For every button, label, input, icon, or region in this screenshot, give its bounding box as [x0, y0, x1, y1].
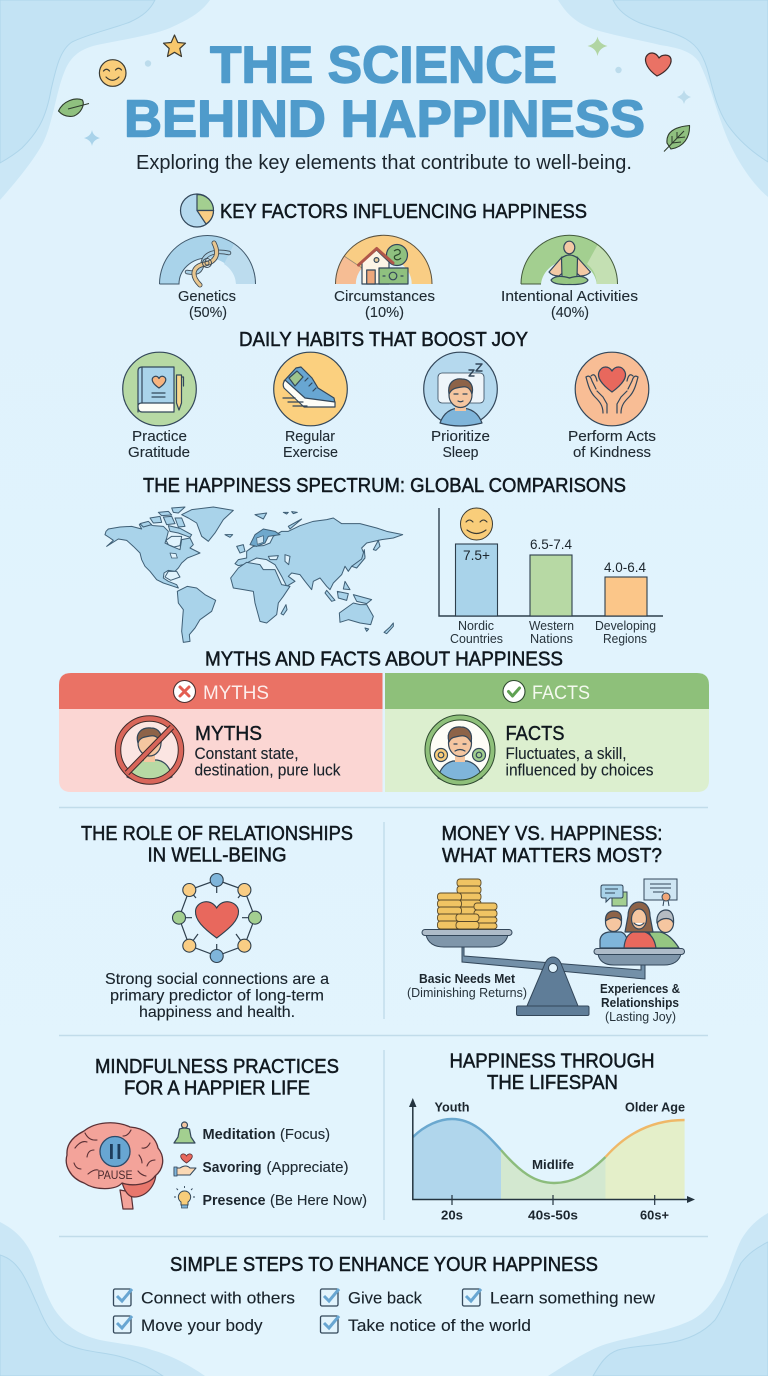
right pan with people: [594, 879, 684, 965]
heading: [81, 823, 353, 866]
chart labels: 60s+: [640, 1208, 669, 1222]
icon: check badge: [503, 680, 525, 702]
heading: MINDFULNESS PRACTICES: [95, 1056, 339, 1078]
chart labels: 20s: [441, 1208, 463, 1222]
heading: THE LIFESPAN: [487, 1072, 618, 1094]
right scale label: [600, 981, 680, 1024]
label: exercise: [283, 428, 338, 461]
relationships body text: happiness and health.: [139, 1004, 295, 1021]
chart labels: Western: [529, 619, 574, 633]
habit: gratitude: [123, 352, 196, 426]
heading: DAILY HABITS THAT BOOST JOY: [239, 329, 528, 351]
left scale label: Basic Needs Met: [419, 971, 516, 986]
section: happiness spectrum: [105, 475, 663, 646]
icon: brain with pause: [66, 1123, 163, 1209]
icon: crossed-out person: [118, 718, 181, 782]
section: simple steps: [114, 1254, 656, 1335]
heading: SIMPLE STEPS TO ENHANCE YOUR HAPPINESS: [170, 1254, 598, 1276]
heading: THE HAPPINESS SPECTRUM: GLOBAL COMPARISONS: [143, 475, 626, 497]
heading: MONEY VS. HAPPINESS:: [442, 823, 662, 845]
myths text: MYTHS: [195, 723, 262, 745]
background blob: bottom right: [548, 1213, 768, 1376]
chart labels: Regions: [603, 632, 647, 646]
heading: [95, 1056, 339, 1100]
icon: heart: [645, 53, 671, 76]
practice: presence: Presence: [202, 1192, 266, 1209]
label: exercise: Exercise: [283, 444, 338, 461]
icon: balance scale: [422, 879, 684, 1016]
icon: pie chart: [180, 194, 214, 227]
bar: developing: 4.0-6.4: [604, 560, 646, 575]
background blob: bottom left: [0, 1222, 205, 1376]
world map: [105, 507, 403, 642]
facts text: Fluctuates, a skill,: [506, 744, 626, 763]
step: move your body: Move your body: [141, 1316, 263, 1335]
label: gratitude: [128, 428, 190, 461]
icon: house, coin and banknote: [358, 244, 408, 284]
practice: savoring: Savoring: [202, 1159, 262, 1176]
heading: IN WELL-BEING: [148, 844, 286, 866]
practice: meditation: (Focus): [280, 1126, 330, 1143]
myths text: destination, pure luck: [194, 760, 341, 780]
chart labels: [434, 1100, 685, 1222]
people: [600, 902, 679, 948]
label: intentional activities: [501, 288, 638, 321]
icon: social network heart: [172, 874, 262, 962]
facts text: influenced by choices: [506, 760, 654, 780]
practice: presence: (Be Here Now): [270, 1192, 367, 1209]
facts text: FACTS: [506, 723, 564, 745]
habit: sleep: [424, 352, 497, 426]
section: daily habits: [123, 329, 656, 461]
heading: MYTHS AND FACTS ABOUT HAPPINESS: [205, 648, 563, 670]
practice: savoring: [174, 1154, 349, 1176]
panel: facts: [385, 673, 709, 792]
label: sleep: Sleep: [442, 444, 478, 461]
chart labels: Nations: [530, 632, 573, 646]
myths banner label: MYTHS: [203, 683, 269, 704]
label: sleep: [431, 428, 490, 461]
heading: FOR A HAPPIER LIFE: [124, 1078, 310, 1100]
bar: nordic: 7.5+: [463, 548, 490, 563]
icon: right leaf: [664, 126, 690, 152]
step: give back: Give back: [348, 1288, 422, 1308]
dot right: [615, 67, 622, 73]
heading: KEY FACTORS INFLUENCING HAPPINESS: [220, 201, 587, 223]
title: THE SCIENCE: [210, 36, 557, 94]
chart labels: Countries: [450, 632, 503, 646]
gauge: intentional activities: [521, 235, 618, 285]
icon: DNA: [187, 243, 229, 285]
gauge: circumstances: [335, 235, 432, 284]
label: intentional activities: (40%): [551, 304, 589, 321]
icon: person with emotions: [427, 717, 493, 784]
title: [124, 36, 645, 148]
background blob: top left: [0, 0, 210, 200]
label: genetics: Genetics: [178, 288, 236, 305]
label: circumstances: [334, 288, 435, 321]
heading: [442, 823, 662, 867]
label: genetics: (50%): [189, 304, 227, 321]
chart labels: Youth: [434, 1100, 470, 1114]
subtitle: Exploring the key elements that contribute to well-being.: [136, 152, 632, 174]
label: genetics: [178, 288, 236, 321]
label: kindness: [568, 428, 656, 461]
section: myths and facts: [59, 648, 709, 792]
relationships body text: primary predictor of long-term: [110, 988, 324, 1004]
chart labels: Midlife: [532, 1157, 574, 1172]
right scale label: (Lasting Joy): [605, 1009, 676, 1024]
icon: star: [164, 35, 186, 56]
section: key factors: [160, 194, 638, 321]
bar: western: 6.5-7.4: [530, 537, 572, 552]
left pan with coins: [422, 879, 512, 947]
heading: THE ROLE OF RELATIONSHIPS: [81, 823, 353, 845]
bar chart: [439, 508, 663, 646]
background blob: top right: [558, 0, 768, 197]
right scale label: Experiences &: [600, 981, 680, 996]
myths text: Constant state,: [194, 744, 298, 763]
step: take notice of the world: Take notice of the world: [348, 1316, 531, 1335]
chart labels: Nordic: [458, 619, 494, 633]
dot left: [145, 60, 151, 67]
label: gratitude: Gratitude: [128, 444, 190, 461]
certificate: [644, 879, 677, 906]
label: circumstances: Circumstances: [334, 288, 435, 305]
icon: blue sparkle right: [677, 90, 691, 104]
label: kindness: Perform Acts: [568, 428, 656, 445]
facts banner label: FACTS: [532, 683, 590, 704]
left scale label: (Diminishing Returns): [407, 985, 527, 1000]
chat bubbles: [601, 885, 627, 906]
heading: HAPPINESS THROUGH: [450, 1050, 654, 1072]
relationships body text: Strong social connections are a: [105, 971, 329, 988]
practice: meditation: [174, 1122, 330, 1143]
label: circumstances: (10%): [365, 304, 404, 321]
relationships body text: [105, 971, 329, 1021]
icon: left leaf: [58, 99, 89, 116]
bar: western: [530, 537, 572, 616]
chart labels: 40s-50s: [528, 1208, 578, 1222]
label: exercise: Regular: [285, 428, 335, 445]
icon: green sparkle: [588, 36, 608, 56]
section: relationships: [81, 823, 353, 1021]
icon: smiley: [460, 508, 492, 540]
section: mindfulness: [66, 1056, 367, 1209]
heading: [450, 1050, 654, 1094]
icon: brain with pause: PAUSE: [98, 1168, 132, 1182]
heading: WHAT MATTERS MOST?: [442, 845, 662, 867]
title: BEHIND HAPPINESS: [124, 90, 645, 148]
icon: meditating figure: [549, 241, 590, 285]
label: kindness: of Kindness: [573, 444, 651, 461]
step: learn something new: Learn something new: [490, 1288, 656, 1308]
facts text: [506, 723, 654, 780]
bar: nordic: [456, 544, 498, 616]
panel: myths: [59, 673, 382, 792]
label: sleep: Prioritize: [431, 428, 490, 445]
habit: kindness: [575, 352, 649, 426]
practice: meditation: Meditation: [202, 1126, 276, 1143]
chart labels: Developing: [595, 619, 656, 633]
decorative icons around the title: [58, 35, 691, 152]
chart labels: [450, 619, 656, 646]
icon: blue sparkle left: [84, 130, 100, 146]
myths text: [194, 723, 341, 780]
step: connect with others: Connect with others: [141, 1288, 295, 1308]
gauge: genetics: [160, 236, 256, 285]
left scale label: [407, 971, 527, 1000]
practice: savoring: (Appreciate): [266, 1159, 349, 1176]
label: intentional activities: Intentional Activities: [501, 288, 638, 305]
icon: x badge: [174, 680, 196, 702]
practice: presence: [174, 1186, 367, 1209]
right scale label: Relationships: [601, 995, 679, 1010]
area chart: [409, 1098, 695, 1222]
chart labels: Older Age: [625, 1100, 685, 1114]
section: money vs happiness: [407, 823, 684, 1024]
label: gratitude: Practice: [132, 428, 187, 445]
bar: developing: [604, 560, 647, 616]
icon: smiley: [99, 60, 126, 86]
habit: exercise: [274, 352, 347, 426]
section: lifespan: [409, 1050, 695, 1222]
